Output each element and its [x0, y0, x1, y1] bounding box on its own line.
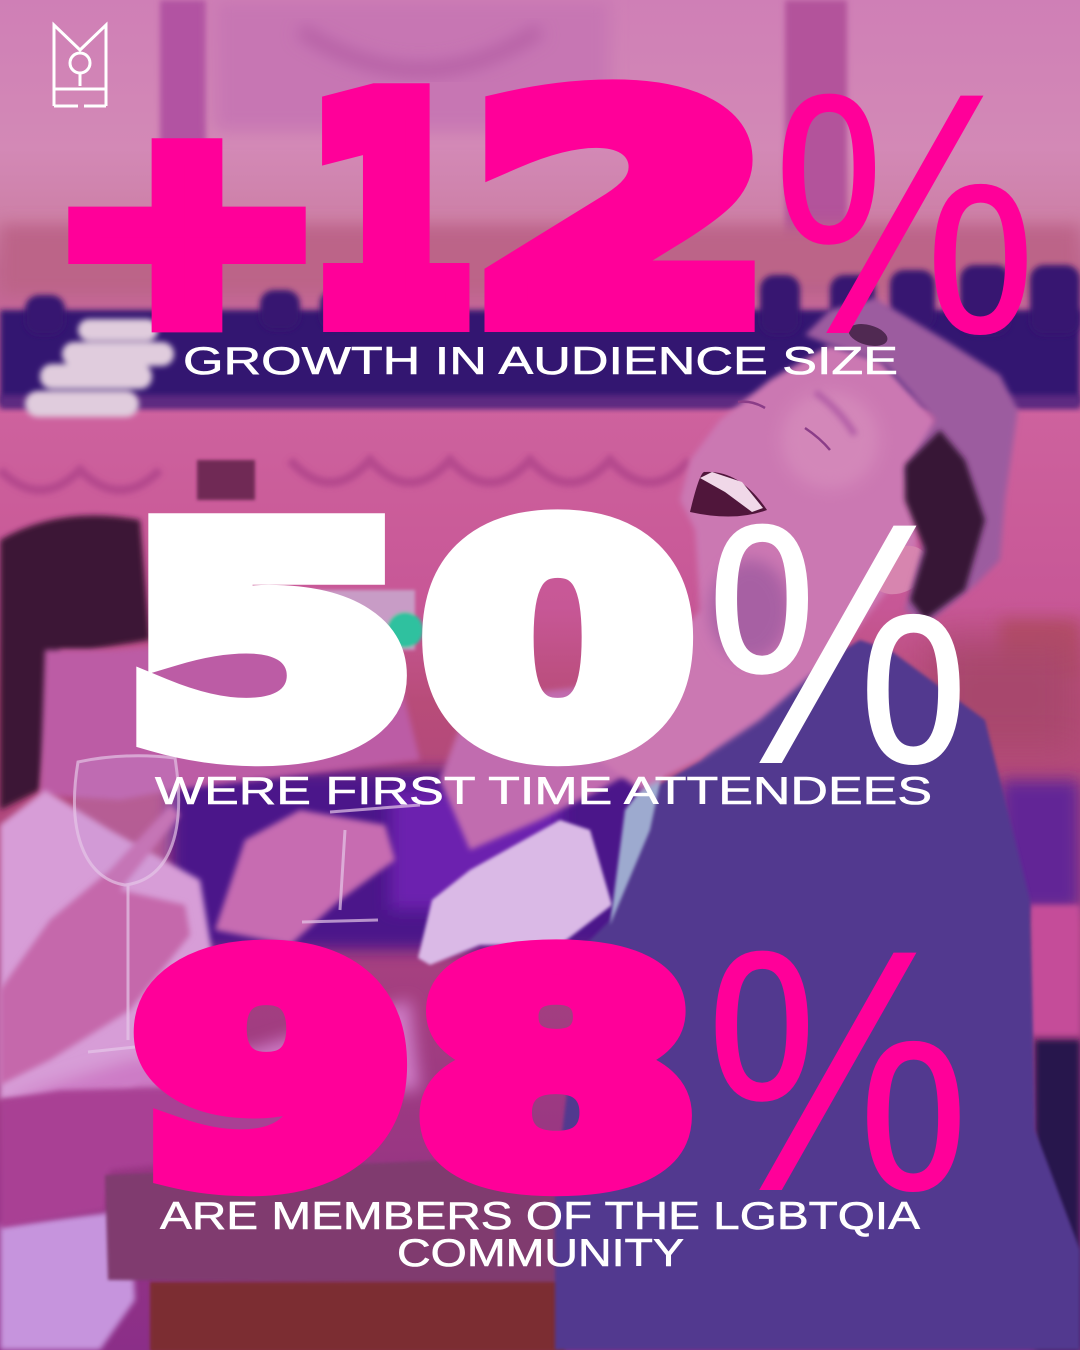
green ball and pale shelf — [250, 590, 423, 650]
stat 3: number 98: 9 — [133, 899, 413, 1248]
woman: shirt — [0, 790, 220, 1100]
stat 1: number +12: 1 — [307, 40, 474, 389]
man's eyes and brows — [738, 392, 855, 450]
stat 3: label: COMMUNITY — [397, 1232, 684, 1275]
woman: face and neck — [40, 640, 420, 800]
dark gaps behind hands — [170, 770, 650, 950]
stat 2: number 50: 5 — [125, 469, 415, 818]
stat 1: label: GROWTH IN AUDIENCE SIZE — [183, 340, 898, 383]
man's jacket — [555, 640, 1080, 1350]
woman: hair — [0, 516, 150, 810]
stat 3: percent: % — [705, 879, 970, 1264]
stat 2: number 50 — [125, 469, 692, 818]
man's hair — [805, 298, 1018, 625]
white lights — [25, 319, 174, 417]
stat 3: number 98: 8 — [415, 899, 697, 1249]
stat 3: number 98 — [133, 899, 697, 1249]
stat 1: percent: % — [772, 22, 1037, 407]
right side — [1000, 780, 1080, 910]
stat 3: label: ARE MEMBERS OF THE LGBTQIA — [160, 1195, 920, 1238]
stat 1: number +12: + — [50, 72, 324, 383]
hands and arm — [0, 805, 395, 1228]
stat 2: number 50: 0 — [423, 469, 692, 818]
stat 2: label: WERE FIRST TIME ATTENDEES — [155, 770, 932, 813]
wine glasses — [75, 756, 420, 1052]
stat 3: label — [160, 1195, 920, 1275]
stat 1: number +12 — [50, 39, 771, 389]
stat 1: number +12: 2 — [472, 39, 771, 388]
logo — [54, 25, 106, 106]
man's mouth — [690, 472, 767, 517]
man's sleeve — [418, 820, 612, 965]
table — [105, 1155, 560, 1285]
stat 2: percent: % — [705, 452, 970, 837]
man's face and neck — [600, 345, 935, 790]
